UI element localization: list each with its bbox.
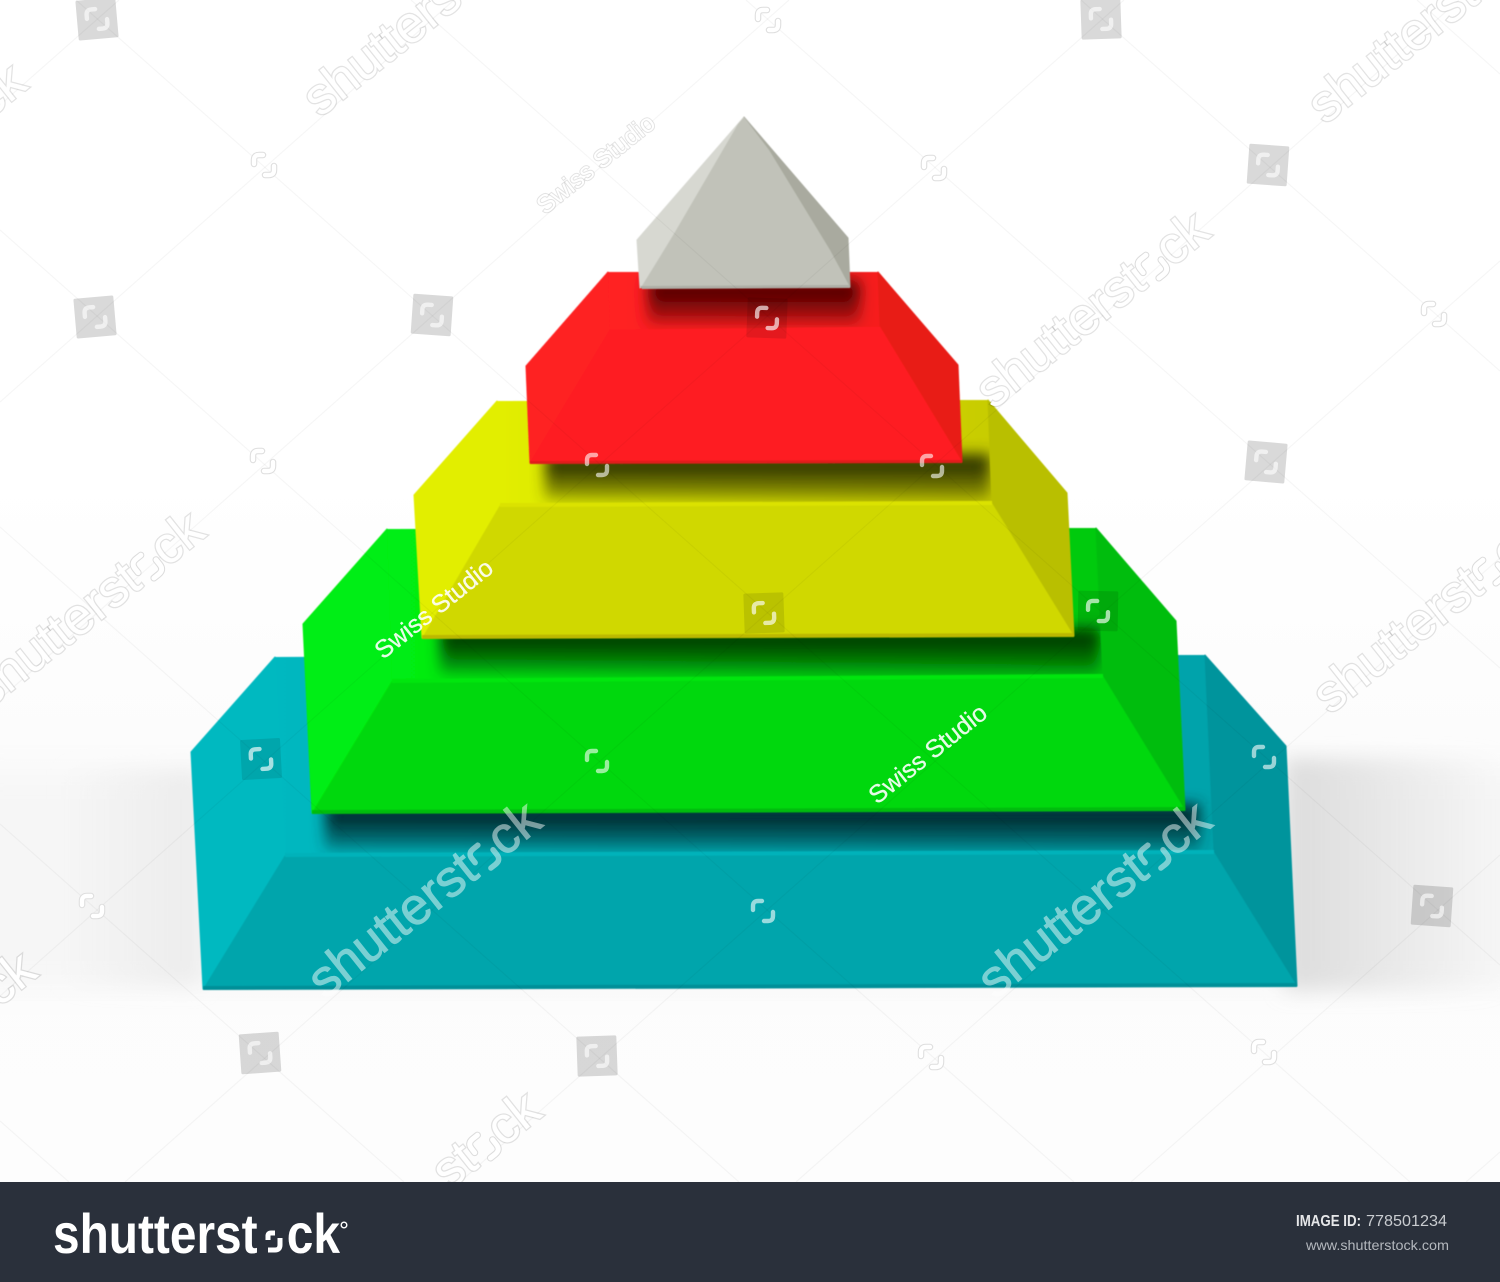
image id: IMAGE ID: <box>1296 1213 1361 1230</box>
tier 3: yellow <box>414 400 1074 639</box>
pyramid <box>191 117 1297 990</box>
watermark text on pyramid: shutterstock <box>296 789 553 1009</box>
image id <box>1296 1213 1447 1230</box>
watermark text on white: stock <box>420 1079 552 1200</box>
tier 5: grey cap <box>637 117 850 289</box>
image id: 778501234 <box>1366 1213 1447 1230</box>
watermark text on pyramid <box>296 554 1223 1009</box>
watermark icons on pyramid <box>240 297 1274 921</box>
footer logo: shutterstock <box>53 1202 341 1265</box>
footer bar <box>0 1182 1500 1282</box>
watermark text on white: Swiss Studio <box>531 109 661 220</box>
watermark text on pyramid: shutterstock <box>966 789 1223 1009</box>
watermark text on pyramid: Swiss Studio <box>863 699 993 810</box>
tier 2: green <box>303 528 1185 814</box>
website: www.shutterstock.com <box>1305 1237 1449 1253</box>
watermark icons on white <box>73 0 1453 1077</box>
watermark text on pyramid: Swiss Studio <box>369 554 499 665</box>
tier 4: red <box>526 272 962 464</box>
tier 1: teal base <box>191 655 1297 990</box>
watermark text on white: shutterstock <box>964 199 1221 419</box>
